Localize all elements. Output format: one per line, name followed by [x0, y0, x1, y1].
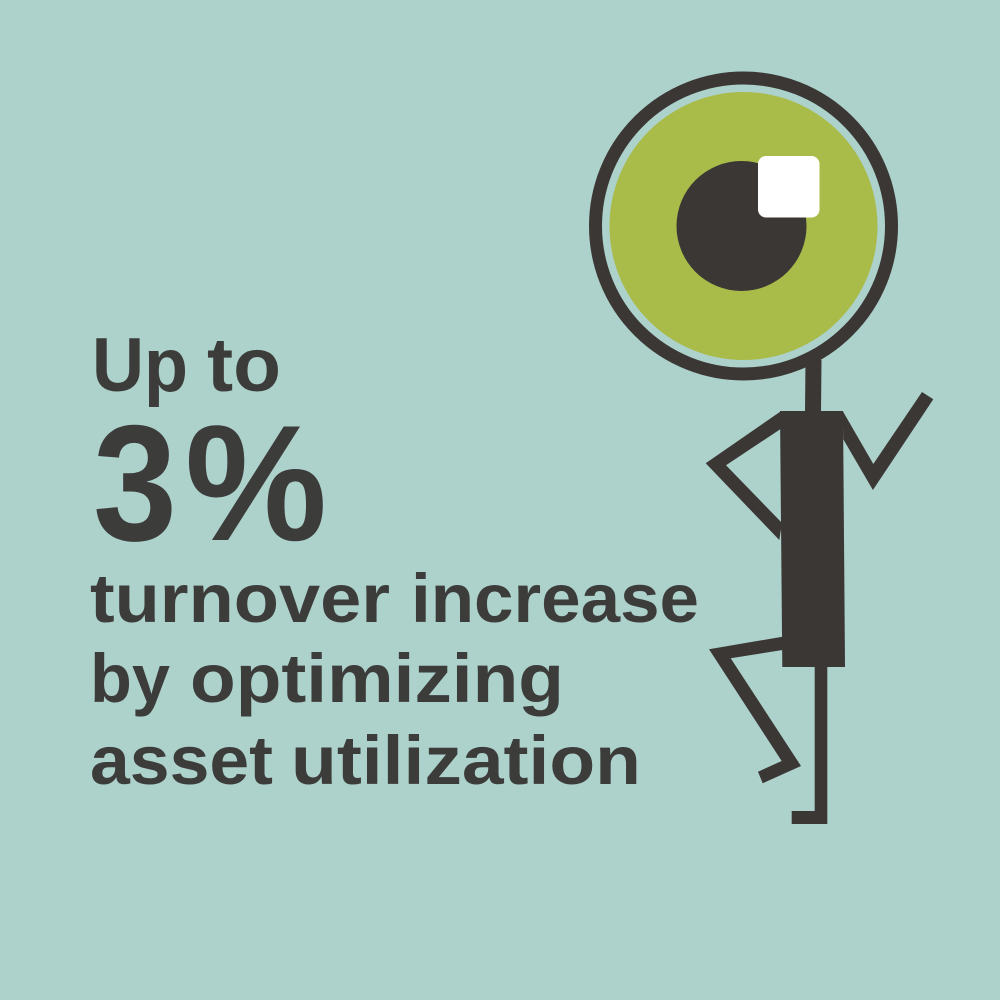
torso — [780, 411, 845, 667]
icon: eye-headed stick figure — [596, 78, 933, 824]
big number: 3%: 3 — [93, 391, 177, 575]
eye highlight — [758, 156, 820, 218]
neck — [805, 360, 822, 412]
left arm on hip — [706, 412, 782, 540]
iris — [610, 92, 878, 360]
line: by optimizing: optimizing — [190, 640, 564, 717]
line: asset utilization: asset — [90, 722, 273, 799]
eye head — [596, 78, 892, 374]
line: turnover increase: turnover — [90, 560, 390, 637]
line: asset utilization: utilization — [291, 722, 641, 799]
eye outline — [596, 78, 892, 374]
heading: up to: to — [207, 323, 281, 408]
statistic text block — [90, 323, 699, 799]
heading: up to — [92, 323, 281, 408]
line: turnover increase: increase — [411, 560, 699, 637]
line: by optimizing: by — [90, 640, 170, 717]
heading: up to: Up — [92, 323, 188, 408]
standing leg and foot — [792, 666, 827, 824]
big number: 3%: % — [185, 391, 327, 575]
line: turnover increase — [90, 560, 699, 637]
pupil — [676, 161, 806, 291]
big number: 3% — [93, 391, 327, 575]
bent leg — [709, 637, 801, 783]
right arm raised — [843, 392, 933, 490]
line: asset utilization — [90, 722, 641, 799]
